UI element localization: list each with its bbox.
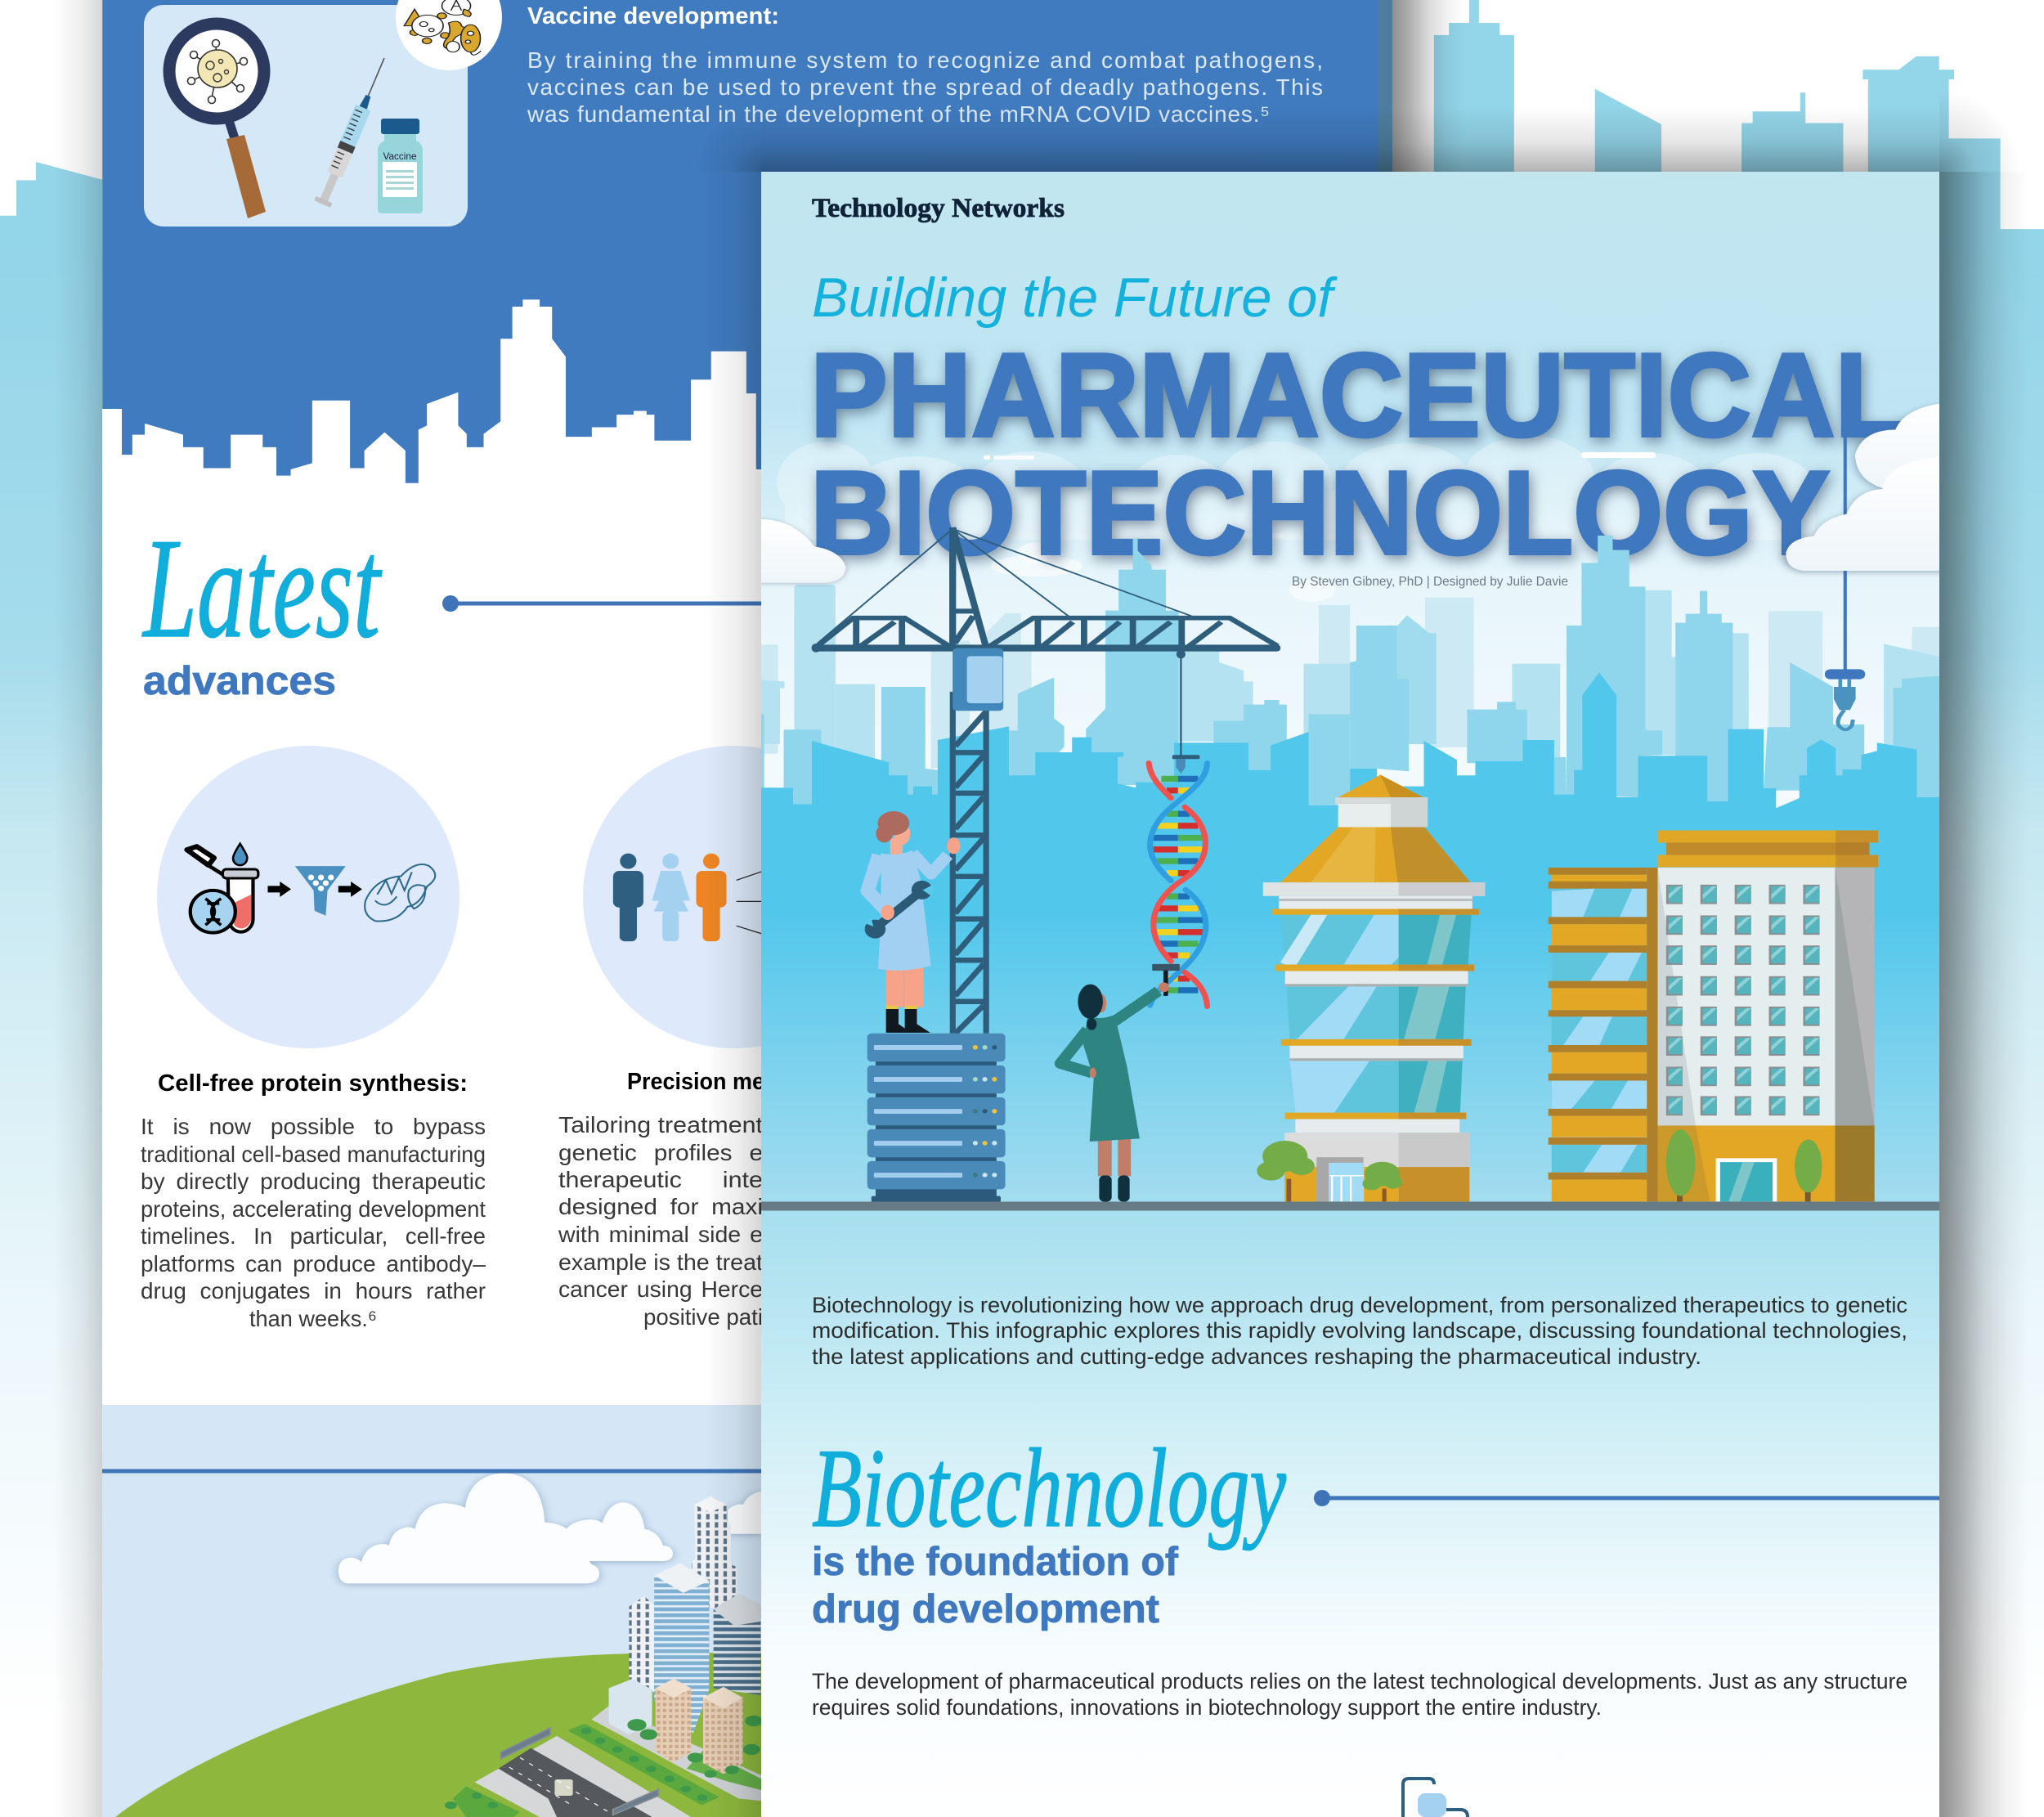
text: precision medicine body: positive pati (643, 1304, 763, 1330)
icon: vaccine vial (378, 119, 423, 213)
text: cell-free protein synthesis body: by directly producing therapeutic (141, 1169, 486, 1194)
front page shadows (696, 90, 2029, 1817)
text: precision medicine body: Tailoring treatment (558, 1112, 763, 1137)
text: intro paragraph (812, 1293, 1907, 1369)
deep blue lower sky (761, 817, 1939, 1202)
text: foundation paragraph (812, 1669, 1907, 1720)
small white cloud bars (984, 452, 1656, 602)
gold stack building (1549, 868, 1658, 1201)
heading: advances: advances (143, 659, 336, 703)
ground strip (761, 1202, 1939, 1210)
title: Pharmaceutical Biotechnology: PHARMACEUTICAL (810, 329, 1906, 461)
crane (812, 527, 1280, 1034)
text: precision medicine body: cancer using Herce (558, 1276, 763, 1302)
text: byline: By Steven Gibney, PhD | Designed by Julie Davie (1292, 575, 1568, 589)
text: cell-free protein synthesis body: traditional cell-based manufacturing (141, 1142, 486, 1167)
DNA double helix (1149, 763, 1208, 1007)
text: cell-free protein synthesis body: platforms can produce antibody– (141, 1251, 486, 1276)
circle panel: precision medicine icon (583, 746, 885, 1048)
text: precision medicine body: therapeutic inte (558, 1167, 763, 1192)
text: vaccine development heading: Vaccine development: (527, 3, 779, 29)
divider line with dot (1314, 1490, 1939, 1506)
text: vaccine development body: was fundamental in the development of the mRNA COVID vaccines.⁵ (527, 101, 1270, 127)
crane mast lattice (953, 692, 986, 1034)
text: precision medicine body: genetic profiles e (558, 1140, 763, 1165)
vaccine illustration card (144, 0, 502, 227)
text: precision medicine heading: Precision me (627, 1069, 764, 1095)
panel: front page (756, 172, 1948, 1817)
text: intro paragraph: Biotechnology is revolutionizing how we approach drug development, from personalized therapeutics to genetic (812, 1293, 1907, 1317)
icon: partial machine at bottom (1403, 1779, 1468, 1817)
title: Pharmaceutical Biotechnology: BIOTECHNOLOGY (810, 446, 1830, 579)
heading: Latest script: Latest (141, 509, 383, 667)
white office building (1658, 830, 1878, 1201)
text: precision medicine body (558, 1112, 763, 1330)
trees (1257, 1129, 1822, 1201)
person: woman reaching DNA (1060, 964, 1180, 1202)
text: vaccine development body: vaccines can be used to prevent the spread of deadly pathogens. This (527, 74, 1323, 100)
heading: Biotechnology script: Biotechnology (812, 1425, 1287, 1550)
text: vaccine development body (527, 47, 1323, 127)
server stack (867, 1034, 1006, 1202)
text: cell-free protein synthesis heading: Cell-free protein synthesis: (158, 1070, 468, 1097)
text: cell-free protein synthesis body (141, 1114, 486, 1331)
text: cell-free protein synthesis body: timelines. In particular, cell-free (141, 1223, 486, 1249)
lower gradient panel (761, 1210, 1939, 1817)
buildings (1257, 774, 1878, 1201)
panel: back page (102, 0, 1392, 1817)
text: intro paragraph: the latest applications and cutting-edge advances reshaping the pharmaceutical industry. (812, 1344, 1701, 1369)
crane jib truss (818, 618, 1277, 646)
text: foundation paragraph: The development of pharmaceutical products relies on the latest technological developments. Just as any structure (812, 1669, 1907, 1694)
circle panel: cell-free protein synthesis icon (157, 746, 459, 1048)
blue section with skyline edge (102, 0, 1378, 483)
second crane line and hook (1825, 436, 1865, 729)
divider line with dot (442, 595, 765, 612)
crane cab (953, 648, 1003, 711)
green hill (115, 1653, 791, 1817)
city skyline left half (761, 538, 1351, 818)
haze clouds behind title (777, 436, 1815, 540)
panel: lower sky band with clouds and city (102, 1405, 791, 1817)
clouds (338, 1474, 762, 1583)
crane pulley and cable to DNA (1176, 651, 1186, 659)
glass tower (1263, 774, 1485, 1201)
person: woman with wrench (863, 811, 960, 1033)
text: precision medicine body: example is the treat (558, 1249, 763, 1275)
heading: is the foundation of drug development: is the foundation of (812, 1540, 1179, 1584)
text: cell-free protein synthesis body: than weeks.⁶ (249, 1306, 377, 1331)
text: cell-free protein synthesis body: drug conjugates in hours rather (141, 1278, 486, 1303)
crane peak (953, 527, 986, 646)
right white clouds (1786, 402, 1948, 571)
isometric city (445, 1496, 764, 1817)
text: Building the Future of: Building the Future of (812, 267, 1338, 329)
city skyline right half (1350, 536, 1940, 818)
crane cables (818, 529, 1193, 644)
text: Technology Networks logo: Technology Networks (812, 194, 1065, 223)
text: precision medicine body: designed for maxi (558, 1194, 763, 1219)
back page shadows (53, 0, 1466, 1817)
icon: syringe (314, 55, 392, 208)
text: intro paragraph: modification. This infographic explores this rapidly evolving landscape, discussing foundational technologies, (812, 1318, 1907, 1343)
left white cloud (756, 519, 846, 583)
text: cell-free protein synthesis body: proteins, accelerating development (141, 1196, 486, 1222)
heading: is the foundation of drug development: drug development (812, 1587, 1159, 1631)
icon: vaccine vial: Vaccine (383, 150, 417, 162)
text: vaccine development body: By training the immune system to recognize and combat pathogens, (527, 47, 1323, 73)
text: precision medicine body: with minimal side e (558, 1222, 763, 1247)
heading: is the foundation of drug development (812, 1540, 1179, 1631)
text: foundation paragraph: requires solid foundations, innovations in biotechnology support the entire industry. (812, 1695, 1602, 1720)
text: cell-free protein synthesis body: It is now possible to bypass (141, 1114, 486, 1139)
title: Pharmaceutical Biotechnology (809, 347, 1903, 569)
icon: pathogens in white circle (396, 0, 502, 70)
icon: magnifying glass with virus (169, 24, 266, 218)
